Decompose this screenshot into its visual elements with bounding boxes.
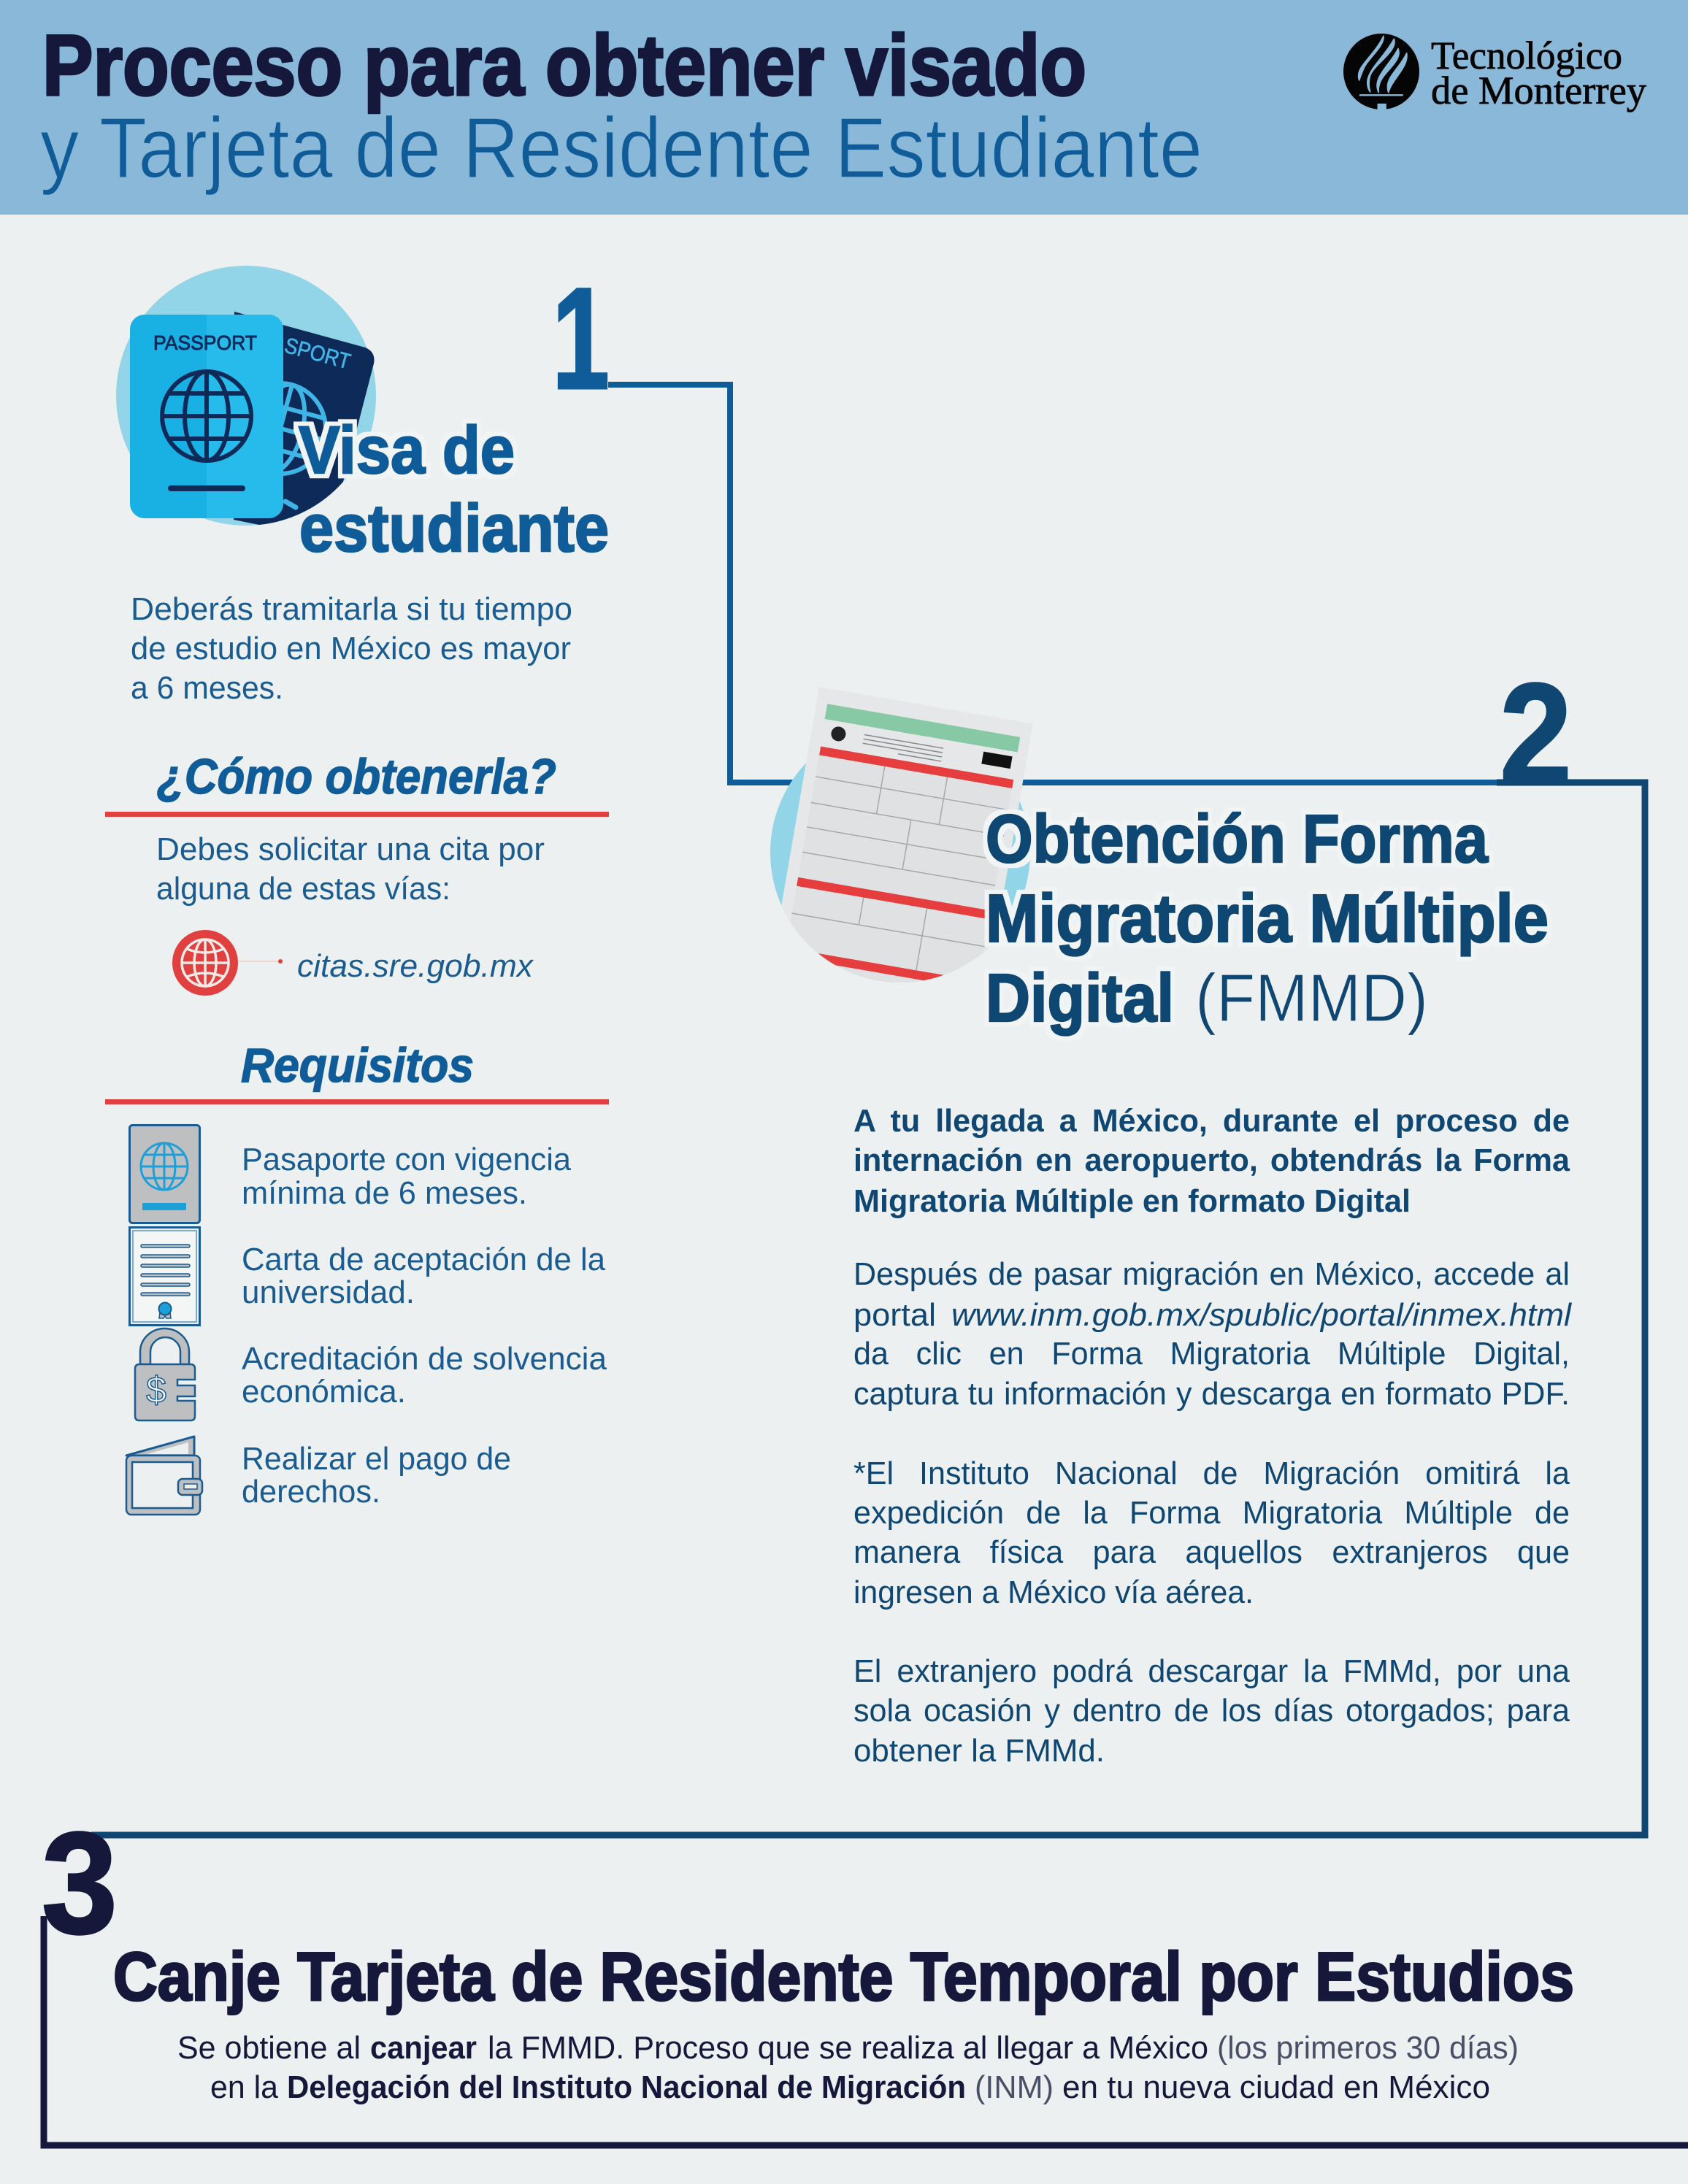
text: portal instructions: Después de pasar migración en México, accede al	[853, 1256, 1570, 1292]
heading: visa de estudiante: Visa de	[299, 413, 515, 488]
text: canje description: canjear	[370, 2030, 477, 2066]
icon: passports: PASSPORT	[153, 331, 257, 354]
text: intro: Deberás tramitarla si tu tiempo	[131, 591, 572, 627]
frame line of step 3	[44, 1916, 1688, 2145]
text: descarga FMMd: El extranjero podrá descargar la FMMd, por una	[853, 1653, 1570, 1689]
link: citas	[172, 930, 534, 996]
text: canje description: (INM)	[975, 2069, 1054, 2105]
text: canje description: Delegación del Instituto Nacional de Migración	[287, 2069, 966, 2105]
requirement: carta: universidad.	[242, 1274, 415, 1310]
logo: Tecnológico de Monterrey	[1343, 34, 1646, 112]
text: solicitar cita	[156, 831, 545, 907]
text: llegada a México: A tu llegada a México, durante el proceso de	[853, 1103, 1570, 1139]
text: descarga FMMd	[853, 1652, 1573, 1769]
text: nota INM: manera física para aquellos extranjeros que	[853, 1534, 1570, 1570]
connector line from step 2 to step 3	[91, 783, 1645, 1835]
number 3: 3	[42, 1802, 118, 1964]
text: canje description: la FMMD. Proceso que se realiza al llegar a México	[488, 2030, 1208, 2066]
text: canje description: (los primeros 30 días)	[1217, 2030, 1519, 2066]
text: portal instructions: www.inm.gob.mx/spublic/portal/inmex.html	[951, 1297, 1572, 1333]
requirement: solvencia: $	[146, 1369, 166, 1410]
requirement: carta: Carta de aceptación de la	[242, 1242, 606, 1277]
text: llegada a México	[853, 1101, 1573, 1219]
requirement: pago de derechos: derechos.	[242, 1474, 380, 1510]
text: canje description: Se obtiene al	[177, 2030, 361, 2066]
heading: visa de estudiante	[299, 413, 609, 566]
panel: step 1 visa de estudiante	[105, 258, 610, 1515]
heading: visa de estudiante: estudiante	[299, 491, 609, 566]
text: nota INM	[853, 1454, 1573, 1610]
heading: cómo obtenerla: ¿Cómo obtenerla?	[157, 749, 556, 804]
text: canje description	[177, 2030, 1519, 2105]
text: canje description: en la	[210, 2069, 279, 2105]
text: llegada a México: internación en aeropuerto, obtendrás la Forma	[853, 1142, 1570, 1178]
requirement: solvencia	[135, 1329, 607, 1420]
icon: passports	[116, 266, 376, 526]
text: descarga FMMd: sola ocasión y dentro de los días otorgados; para	[853, 1693, 1570, 1729]
requirement: pasaporte: Pasaporte con vigencia	[242, 1142, 572, 1177]
title: y Tarjeta de Residente Estudiante	[40, 100, 1202, 196]
heading: obtención FMMD: Digital	[986, 960, 1174, 1036]
requirement: pago de derechos	[126, 1437, 511, 1515]
title	[40, 18, 1202, 196]
icon: passports: SPORT	[282, 334, 353, 374]
requirement: pago de derechos: Realizar el pago de	[242, 1441, 511, 1477]
heading: obtención FMMD: Obtención Forma	[986, 801, 1489, 877]
text: portal instructions	[853, 1255, 1573, 1414]
panel: step 3 canje tarjeta	[42, 1802, 1574, 2105]
icon: form document	[770, 688, 1032, 983]
requirement: pasaporte: mínima de 6 meses.	[242, 1175, 527, 1211]
text: portal instructions: da clic en Forma Migratoria Múltiple Digital,	[853, 1336, 1570, 1372]
heading: obtención FMMD	[986, 801, 1549, 1036]
text: descarga FMMd: obtener la FMMd.	[853, 1733, 1105, 1769]
header banner	[0, 0, 1688, 215]
text: llegada a México: Migratoria Múltiple en formato Digital	[853, 1183, 1411, 1219]
text: solicitar cita: Debes solicitar una cita por	[156, 831, 545, 867]
text: portal instructions: portal	[853, 1297, 936, 1333]
text: nota INM: ingresen a México vía aérea.	[853, 1574, 1254, 1610]
heading: obtención FMMD: (FMMD)	[1195, 960, 1428, 1036]
link: citas: citas.sre.gob.mx	[297, 948, 534, 984]
text: intro: a 6 meses.	[131, 670, 283, 706]
text: solicitar cita: alguna de estas vías:	[156, 871, 450, 907]
text: intro	[131, 591, 572, 706]
number 1: 1	[552, 258, 610, 419]
requirement: solvencia: Acreditación de solvencia	[242, 1341, 607, 1377]
requirement: carta	[130, 1228, 606, 1326]
title: Proceso para obtener visado	[42, 18, 1086, 114]
panel: step 2 forma migratoria	[753, 653, 1573, 1769]
heading: requisitos	[105, 1038, 609, 1104]
logo: Tecnológico de Monterrey: Tecnológico	[1431, 34, 1622, 77]
number 2: 2	[1500, 653, 1572, 815]
logo: Tecnológico de Monterrey: de Monterrey	[1431, 69, 1646, 112]
text: nota INM: *El Instituto Nacional de Migración omitirá la	[853, 1456, 1570, 1491]
text: canje description: en tu nueva ciudad en México	[1062, 2069, 1490, 2105]
heading: obtención FMMD: Migratoria Múltiple	[986, 880, 1549, 956]
requirement: pasaporte	[130, 1126, 572, 1223]
heading: requisitos: Requisitos	[241, 1038, 474, 1092]
text: portal instructions: captura tu información y descarga en formato PDF.	[853, 1376, 1570, 1412]
connector line from step 1 to step 2	[608, 385, 1504, 783]
text: intro: de estudio en México es mayor	[131, 631, 571, 666]
requirement: solvencia: económica.	[242, 1374, 406, 1410]
text: nota INM: expedición de la Forma Migratoria Múltiple de	[853, 1495, 1570, 1531]
